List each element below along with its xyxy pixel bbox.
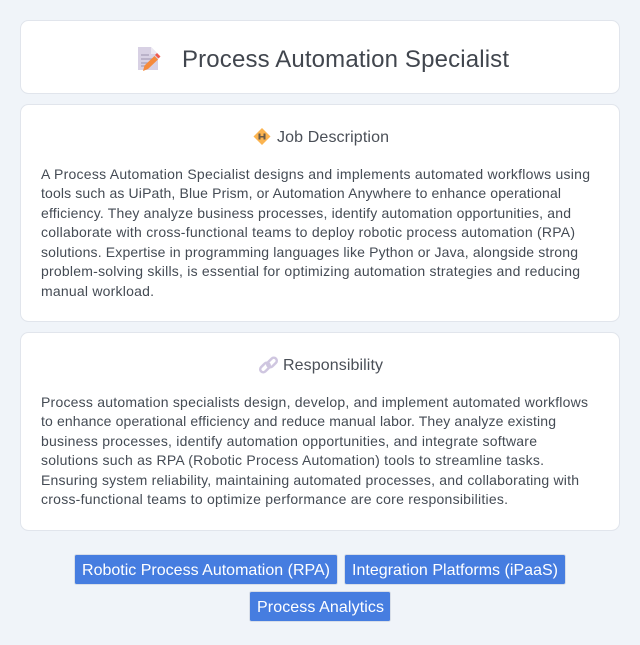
text block: job description: manual workload. <box>41 283 154 299</box>
title: Process Automation Specialist <box>182 46 509 73</box>
text block: responsibility: business processes, identify automation opportunities, and integrate software <box>41 433 537 449</box>
text block: responsibility: to enhance operational efficiency and reduce manual labor. They analyze existing <box>41 413 556 429</box>
tag: integration platforms: Integration Platforms (iPaaS) <box>352 562 558 579</box>
tag: robotic process automation <box>74 554 338 584</box>
text block: job description: tools such as UiPath, Blue Prism, or Automation Anywhere to enhance operational <box>41 185 561 201</box>
text block: job description: problem-solving skills, is essential for optimizing automation strategies and reducing <box>41 263 580 279</box>
tag: robotic process automation: Robotic Process Automation (RPA) <box>82 562 330 579</box>
text block: job description: solutions. Expertise in programming languages like Python or Java, alongside strong <box>41 244 578 260</box>
text block: job description: collaborate with cross-functional teams to deploy robotic process automation (RPA) <box>41 224 575 240</box>
tag: process analytics <box>250 592 390 622</box>
text block: responsibility: Process automation specialists design, develop, and implement automated workflows <box>41 394 588 410</box>
panel: responsibility <box>20 332 620 530</box>
text block: responsibility: solutions such as RPA (Robotic Process Automation) tools to streamline tasks. <box>41 452 544 468</box>
text block: responsibility <box>41 394 588 507</box>
text block: job description: efficiency. They analyze business processes, identify automation opportunities, and <box>41 205 571 221</box>
heading: job description: Job Description <box>277 129 389 146</box>
text block: responsibility: Ensuring system reliability, maintaining automated processes, and collaborating with <box>41 472 579 488</box>
panel: job description <box>20 104 620 322</box>
text block: job description <box>41 166 590 299</box>
icon: chain link <box>259 356 278 374</box>
icon: document with pencil <box>138 47 160 71</box>
panel: title card <box>20 20 620 94</box>
tag: process analytics: Process Analytics <box>257 599 384 616</box>
tag: integration platforms <box>344 554 566 584</box>
icon: orange diamond <box>254 128 270 145</box>
text block: responsibility: cross-functional teams to optimize performance are core responsibilities. <box>41 491 508 507</box>
heading: responsibility: Responsibility <box>283 357 383 374</box>
text block: job description: A Process Automation Specialist designs and implements automated workflows using <box>41 166 590 182</box>
